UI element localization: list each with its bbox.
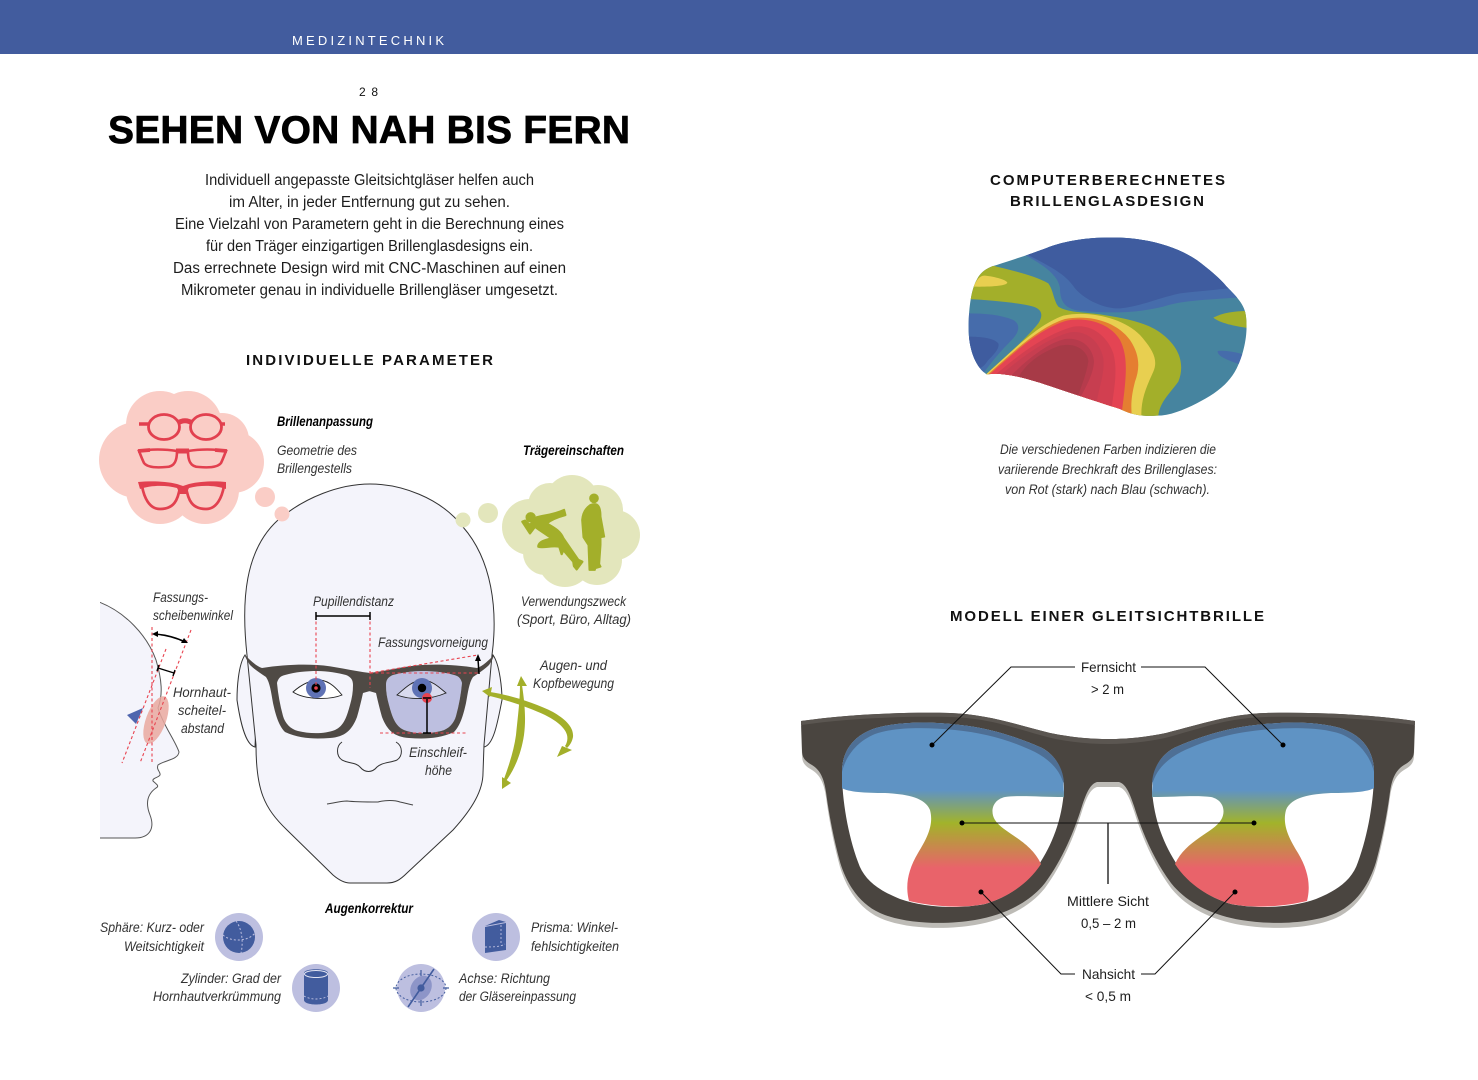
nose bbox=[338, 742, 401, 772]
intro text bbox=[173, 172, 566, 299]
label: Achse: der Gläsereinpassung bbox=[459, 989, 576, 1004]
label: Geometrie bbox=[277, 443, 357, 476]
label: Prisma bbox=[531, 920, 619, 954]
measure lines bbox=[316, 612, 481, 733]
section label: MEDIZINTECHNIK bbox=[292, 33, 444, 48]
intro text: im Alter, in jeder Entfernung gut zu sehen. bbox=[229, 194, 510, 211]
caption bbox=[998, 442, 1217, 497]
label: Trägereinschaften: Trägereinschaften bbox=[523, 443, 624, 458]
diagram: head front view bbox=[237, 484, 502, 883]
intro text: Eine Vielzahl von Parametern geht in die Berechnung eines bbox=[175, 216, 564, 233]
label: Augen- und Kopfbewegung: Kopfbewegung bbox=[533, 676, 614, 691]
label: Augen- und Kopfbewegung: Augen- und bbox=[539, 658, 607, 673]
intro text: Das errechnete Design wird mit CNC-Maschinen auf einen bbox=[173, 260, 566, 277]
label: Fassungsvorneigung: Fassungsvorneigung bbox=[378, 635, 488, 650]
icon: wayfarer glasses bbox=[138, 481, 226, 509]
label: Fassungsscheibenwinkel bbox=[153, 590, 234, 623]
glasses frame bbox=[245, 655, 494, 738]
label: Fassungsscheibenwinkel: Fassungs- bbox=[153, 590, 208, 605]
label: Sphäre: Weitsichtigkeit bbox=[124, 939, 205, 954]
label: Fassungsscheibenwinkel: scheibenwinkel bbox=[153, 608, 234, 623]
label: Mittlere Sicht: Mittlere Sicht bbox=[1067, 893, 1149, 909]
icon: axis bbox=[393, 964, 449, 1012]
heading: computerberechnetes brillenglasdesign: COMPUTERBERECHNETES bbox=[990, 172, 1225, 189]
label: Verwendungszweck: (Sport, Büro, Alltag) bbox=[517, 612, 631, 627]
intro text: für den Träger einzigartigen Brillenglasdesigns ein. bbox=[206, 238, 533, 255]
right half bbox=[1108, 713, 1415, 928]
label: Nahsicht: Nahsicht bbox=[1082, 966, 1135, 982]
label: Einschleifhöhe: Einschleif- bbox=[409, 745, 467, 760]
caption: variierende Brechkraft des Brillenglases: bbox=[998, 462, 1217, 477]
heading: computerberechnetes brillenglasdesign bbox=[990, 172, 1225, 210]
caption: Die verschiedenen Farben indizieren die bbox=[1000, 442, 1216, 457]
label: Einschleifhöhe bbox=[409, 745, 467, 778]
icon: round glasses bbox=[139, 414, 225, 440]
label: Geometrie: Brillengestells bbox=[277, 461, 352, 476]
caption: von Rot (stark) nach Blau (schwach). bbox=[1005, 482, 1210, 497]
pink thought cloud bbox=[99, 391, 290, 524]
right eye bbox=[397, 678, 446, 703]
icon: sphere bbox=[215, 913, 263, 961]
mouth bbox=[327, 800, 413, 805]
arrows: eye and head movement bbox=[482, 676, 573, 789]
label: Geometrie: Geometrie des bbox=[277, 443, 357, 458]
label: Hornhautscheitelabstand bbox=[173, 685, 231, 736]
icon: standing man silhouette bbox=[582, 494, 604, 570]
label: Fernsicht: > 2 m bbox=[1091, 681, 1124, 697]
callout dots bbox=[930, 742, 1286, 894]
label: Hornhautscheitelabstand: Hornhaut- bbox=[173, 685, 231, 700]
label: Augenkorrektur: Augenkorrektur bbox=[324, 901, 414, 916]
icon: prism bbox=[472, 913, 520, 961]
label: Einschleifhöhe: höhe bbox=[425, 763, 452, 778]
callout lines bbox=[932, 667, 1283, 974]
icon: cylinder bbox=[292, 964, 340, 1012]
label: Zylinder: Zylinder: Grad der bbox=[180, 971, 281, 986]
label: Zylinder bbox=[153, 971, 281, 1004]
head ears bbox=[237, 655, 502, 747]
label: Achse bbox=[458, 971, 576, 1004]
heading: individuelle parameter: INDIVIDUELLE PARAMETER bbox=[246, 352, 493, 369]
label: Verwendungszweck bbox=[517, 594, 631, 627]
title: SEHEN VON NAH BIS FERN bbox=[108, 109, 630, 152]
label: Hornhautscheitelabstand: abstand bbox=[181, 721, 224, 736]
label: Sphäre bbox=[100, 920, 205, 954]
label: Pupillendistanz: Pupillendistanz bbox=[313, 594, 394, 609]
icon: profile eye bbox=[127, 708, 143, 724]
chart: lens power map bbox=[968, 238, 1247, 416]
icon: rectangular glasses bbox=[138, 450, 227, 467]
page number: 28 bbox=[359, 85, 378, 99]
label: Mittlere Sicht: 0,5 – 2 m bbox=[1081, 915, 1136, 931]
head outline bbox=[245, 484, 494, 883]
label: Fernsicht bbox=[1081, 659, 1136, 697]
arrow: frame angle bbox=[155, 634, 185, 642]
heading: modell einer gleitsichtbrille: MODELL EINER GLEITSICHTBRILLE bbox=[950, 608, 1264, 625]
label: Mittlere Sicht bbox=[1067, 893, 1149, 931]
heading: computerberechnetes brillenglasdesign: BRILLENGLASDESIGN bbox=[1010, 193, 1204, 210]
left half bbox=[801, 713, 1108, 928]
head right lens tint bbox=[386, 671, 462, 733]
label: Hornhautscheitelabstand: scheitel- bbox=[178, 703, 226, 718]
diagram: profile view bbox=[99, 602, 191, 838]
icon: runner silhouette bbox=[522, 510, 582, 569]
label: Prisma: fehlsichtigkeiten bbox=[531, 939, 619, 954]
bracket: vertex distance bbox=[157, 665, 175, 676]
label: Achse: Achse: Richtung bbox=[458, 971, 550, 986]
left eye bbox=[293, 678, 342, 698]
label: Nahsicht: < 0,5 m bbox=[1085, 988, 1131, 1004]
intro text: Individuell angepasste Gleitsichtgläser helfen auch bbox=[205, 172, 534, 189]
label: Sphäre: Sphäre: Kurz- oder bbox=[100, 920, 204, 935]
label: Augen- und Kopfbewegung bbox=[533, 658, 614, 691]
label: Fernsicht: Fernsicht bbox=[1081, 659, 1136, 675]
header band bbox=[0, 0, 1478, 54]
label: Nahsicht bbox=[1082, 966, 1135, 1004]
label: Prisma: Prisma: Winkel- bbox=[531, 920, 618, 935]
icon: pink nose pad bbox=[143, 696, 169, 744]
label: Brillenanpassung: Brillenanpassung bbox=[277, 414, 374, 429]
green thought cloud bbox=[456, 475, 640, 587]
intro text: Mikrometer genau in individuelle Brillengläser umgesetzt. bbox=[181, 282, 558, 299]
large progressive glasses bbox=[801, 667, 1415, 974]
label: Verwendungszweck: Verwendungszweck bbox=[521, 594, 627, 609]
label: Zylinder: Hornhautverkrümmung bbox=[153, 989, 281, 1004]
